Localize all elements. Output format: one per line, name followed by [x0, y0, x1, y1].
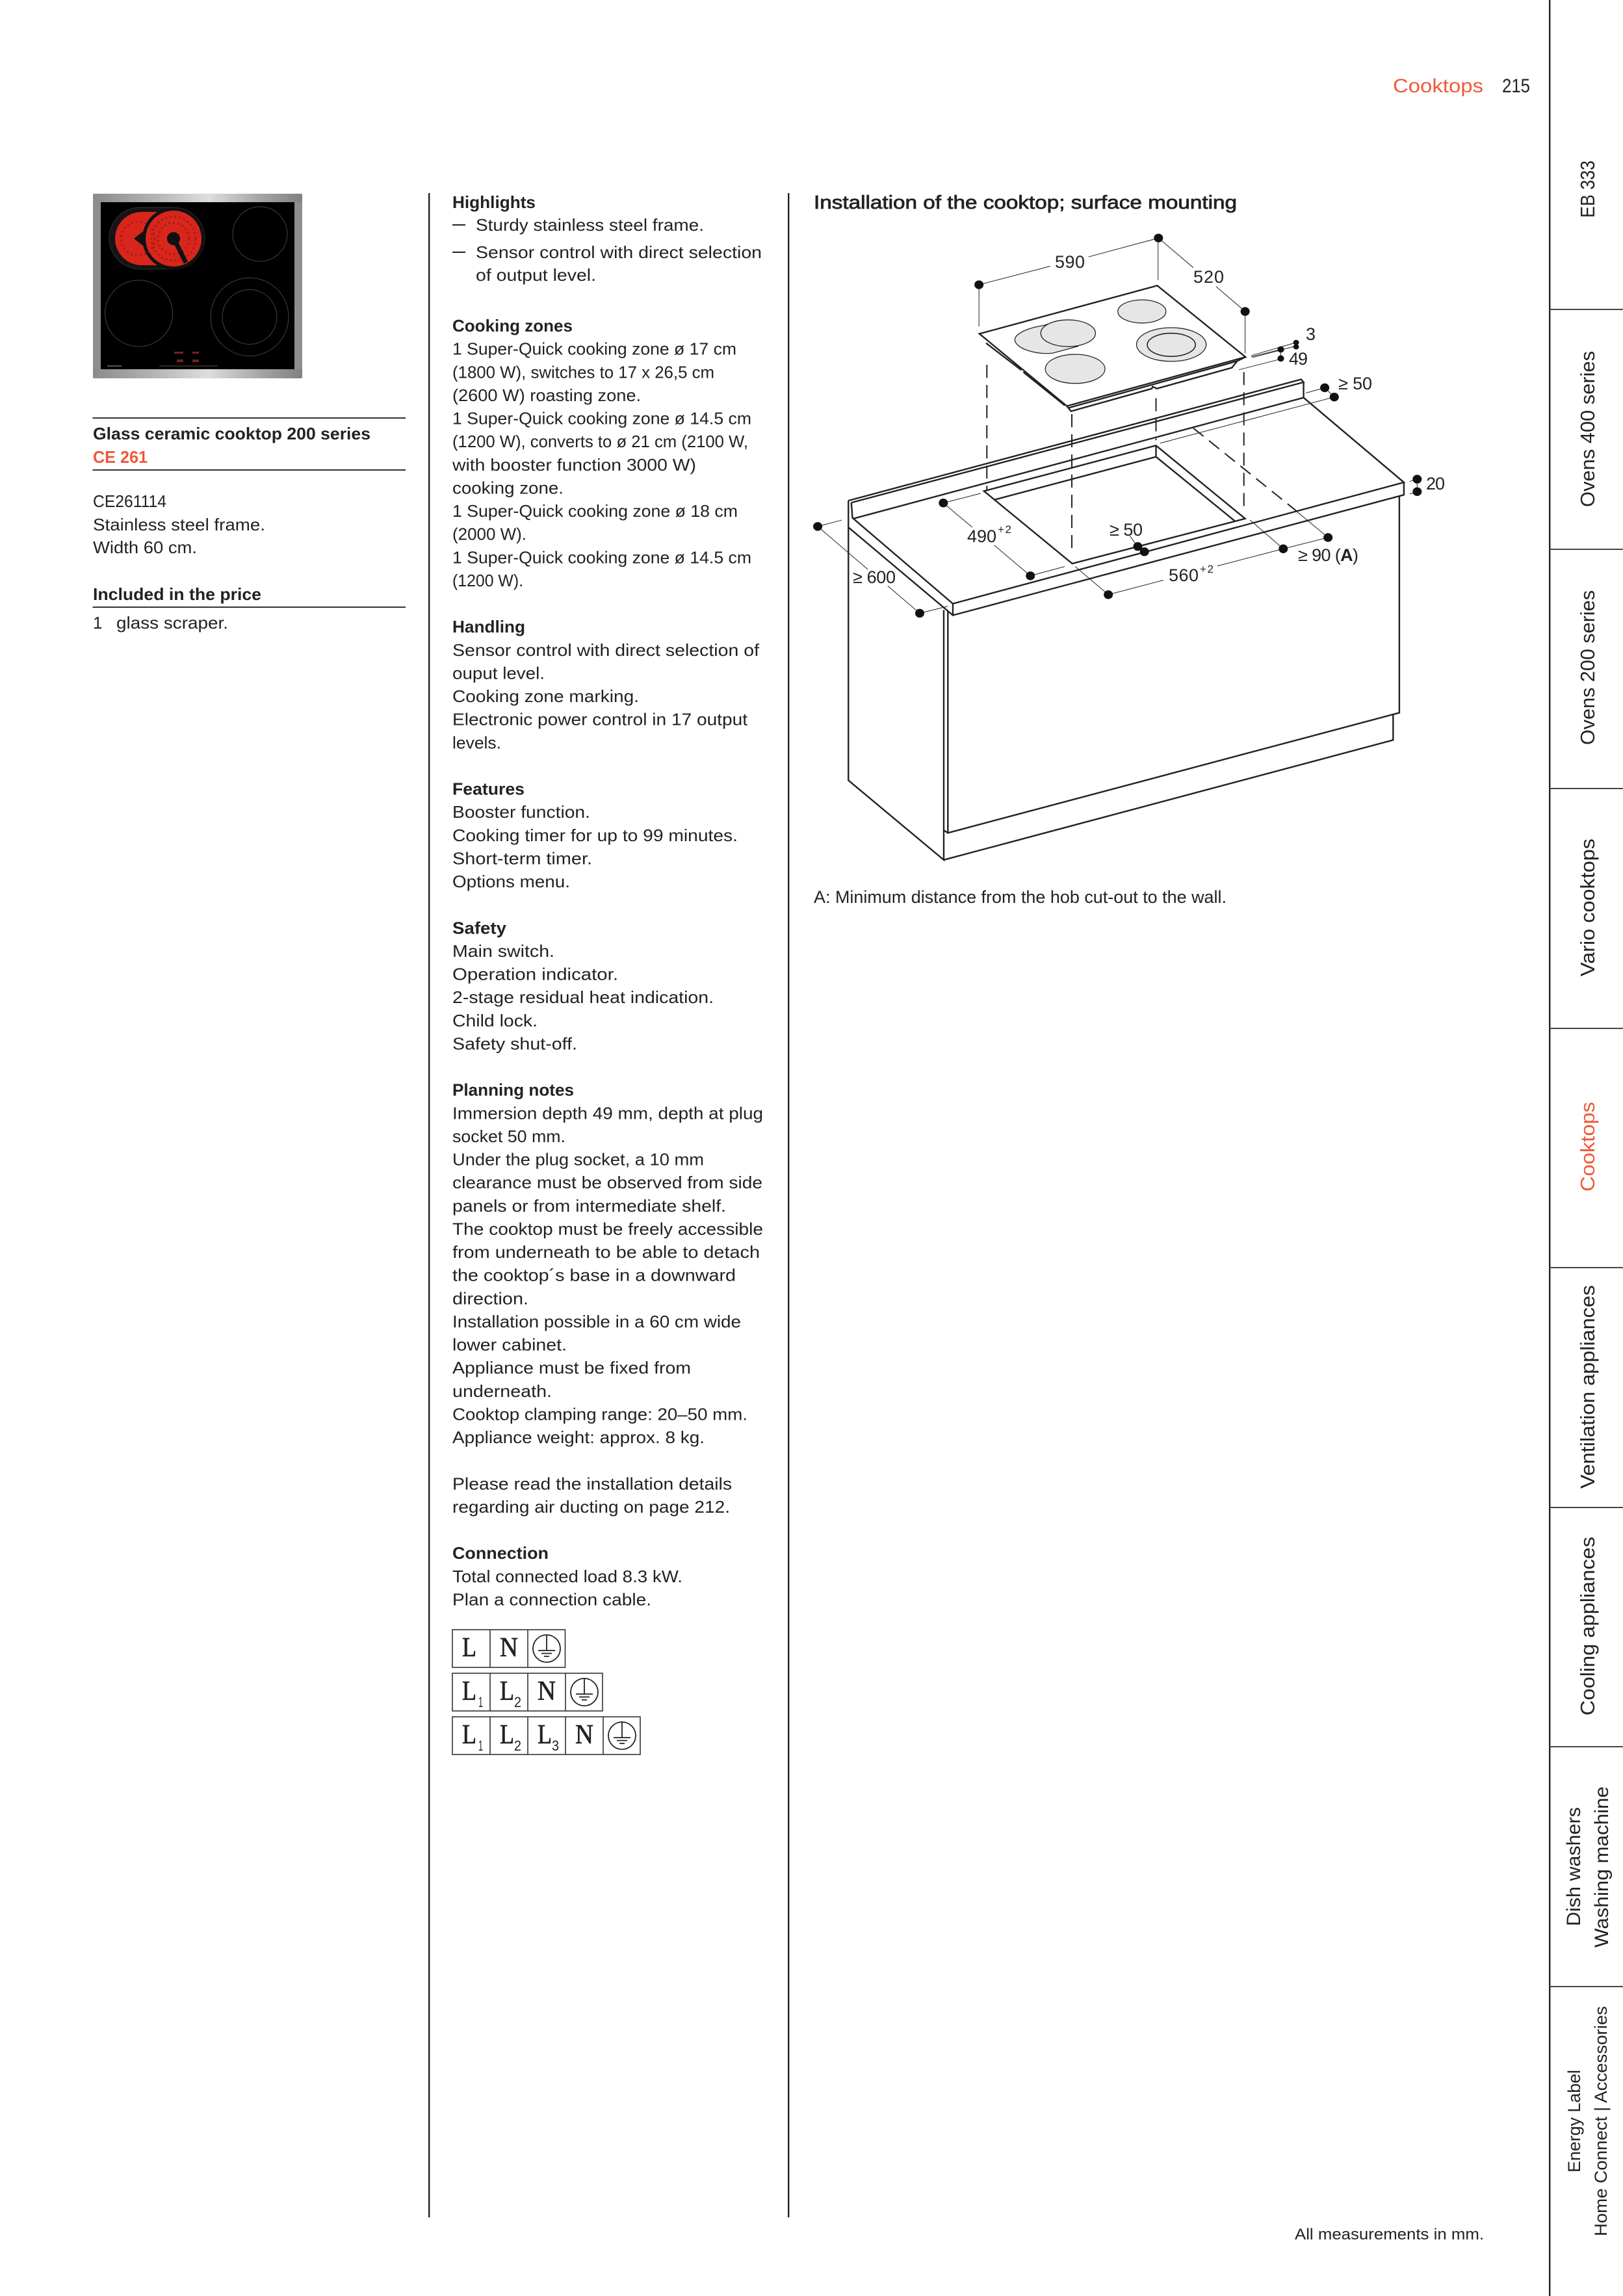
sidebar navigation: Cooling appliances	[1576, 1537, 1599, 1715]
included in the price: 1	[93, 613, 102, 633]
cooking zones: 1 Super-Quick cooking zone ø 18 cm	[452, 501, 738, 521]
features: Features	[452, 779, 525, 798]
page header: Cooktops	[1393, 75, 1483, 97]
features: Booster function.	[452, 802, 590, 822]
planning notes: the cooktop´s base in a downward	[452, 1266, 736, 1285]
planning notes: from underneath to be able to detach	[452, 1242, 760, 1262]
connection table: L1 L2 L3 N earth: 2	[514, 1738, 521, 1754]
dashed projection lines	[987, 365, 1297, 552]
column divider right	[788, 193, 789, 2217]
connection table: L1 L2 N earth: 2	[514, 1694, 521, 1710]
connection table: L1 L2 L3 N earth: L	[462, 1720, 476, 1750]
planning notes: lower cabinet.	[452, 1335, 567, 1355]
safety: Child lock.	[452, 1011, 538, 1030]
highlights	[452, 192, 762, 285]
footer note: All measurements in mm.	[1295, 2226, 1484, 2243]
sidebar navigation: Washing machine	[1591, 1786, 1613, 1948]
connection table: L1 L2 L3 N earth: 1	[478, 1738, 483, 1754]
handling: Cooking zone marking.	[452, 686, 639, 706]
planning notes: Immersion depth 49 mm, depth at plug	[452, 1103, 763, 1123]
connection table: L1 L2 N earth: L	[462, 1676, 476, 1706]
planning notes: The cooktop must be freely accessible	[452, 1219, 763, 1238]
highlights: Sturdy stainless steel frame.	[476, 215, 704, 235]
planning notes: underneath.	[452, 1381, 552, 1401]
sidebar navigation: Home Connect | Accessories	[1591, 2006, 1611, 2236]
dimension labels: +2	[998, 523, 1011, 536]
product title block	[92, 417, 406, 471]
safety: Safety	[452, 918, 507, 937]
page header: 215	[1502, 75, 1530, 97]
planning notes: regarding air ducting on page 212.	[452, 1497, 730, 1517]
dimension labels: 590	[1055, 252, 1085, 272]
highlights: Sensor control with direct selection	[476, 242, 762, 262]
connection: Total connected load 8.3 kW.	[452, 1567, 682, 1586]
connection table: L1 L2 L3 N earth: L	[500, 1720, 514, 1750]
product title block: CE 261	[93, 447, 148, 467]
dimension labels: ≥ 50	[1338, 374, 1372, 393]
dimension labels: 490	[967, 527, 996, 546]
product description	[93, 491, 265, 557]
cooking zones	[452, 316, 751, 590]
planning notes: Under the plug socket, a 10 mm	[452, 1149, 704, 1169]
planning notes: panels or from intermediate shelf.	[452, 1196, 726, 1216]
handling: Electronic power control in 17 output	[452, 710, 748, 729]
cooking zones: 1 Super-Quick cooking zone ø 17 cm	[452, 339, 736, 359]
cooking zones: (2600 W) roasting zone.	[452, 385, 641, 405]
dimension labels: ≥ 50	[1110, 520, 1143, 540]
cooktop	[980, 285, 1245, 411]
connection table: L N earth	[452, 1630, 565, 1667]
planning notes	[452, 1080, 763, 1517]
dimension labels: 3	[1306, 324, 1316, 344]
dimension labels: 560	[1169, 566, 1199, 585]
diagram heading: Installation of the cooktop; surface mounting	[814, 192, 1237, 213]
planning notes: Planning notes	[452, 1080, 574, 1100]
planning notes: direction.	[452, 1288, 528, 1308]
column divider left	[428, 193, 430, 2217]
dimension labels: 49	[1289, 349, 1308, 369]
dimension labels	[853, 252, 1445, 587]
cooking zones: (1200 W), converts to ø 21 cm (2100 W,	[452, 432, 748, 451]
sidebar navigation	[1549, 0, 1623, 2296]
cooking zones: (1800 W), switches to 17 x 26,5 cm	[452, 362, 714, 382]
cooking zones: (1200 W).	[452, 571, 523, 590]
product description: Stainless steel frame.	[93, 515, 265, 534]
handling	[452, 617, 760, 752]
highlights: Highlights	[452, 192, 536, 212]
connection table: L1 L2 N earth	[452, 1673, 603, 1711]
cooking zones: 1 Super-Quick cooking zone ø 14.5 cm	[452, 408, 751, 428]
photo: glass ceramic cooktop	[93, 194, 302, 378]
connection table: L N earth: N	[500, 1633, 518, 1663]
dimension labels: 520	[1193, 267, 1224, 287]
page header	[1393, 75, 1530, 97]
dimension labels: 20	[1426, 474, 1445, 493]
connection: Connection	[452, 1543, 549, 1563]
connection table: L1 L2 L3 N earth	[452, 1717, 640, 1755]
planning notes: Installation possible in a 60 cm wide	[452, 1312, 741, 1331]
planning notes: Please read the installation details	[452, 1474, 732, 1493]
sidebar navigation: EB 333	[1576, 161, 1599, 218]
sidebar navigation: Vario cooktops	[1576, 839, 1599, 976]
product description: CE261114	[93, 491, 166, 511]
handling: Handling	[452, 617, 525, 636]
cooking zones: cooking zone.	[452, 478, 564, 497]
planning notes: Cooktop clamping range: 20–50 mm.	[452, 1404, 747, 1424]
features: Short-term timer.	[452, 848, 592, 868]
cooking zones: Cooking zones	[452, 316, 573, 335]
safety: Safety shut-off.	[452, 1034, 577, 1053]
sidebar navigation: Dish washers	[1563, 1807, 1585, 1926]
dimension labels: +2	[1200, 563, 1214, 575]
features: Options menu.	[452, 872, 570, 891]
connection table: L1 L2 L3 N earth: N	[575, 1720, 593, 1750]
sidebar navigation: Energy Label	[1565, 2070, 1584, 2172]
handling: levels.	[452, 733, 501, 752]
planning notes: Appliance must be fixed from	[452, 1358, 691, 1377]
safety: Main switch.	[452, 941, 554, 961]
handling: ouput level.	[452, 663, 545, 683]
sidebar navigation: Ventilation appliances	[1576, 1285, 1599, 1489]
diagram footnote: A: Minimum distance from the hob cut-out to the wall.	[814, 887, 1227, 907]
dimension lines and dots	[813, 233, 1422, 618]
dimension labels: ≥ 90 (A)	[1298, 545, 1358, 565]
safety: 2-stage residual heat indication.	[452, 987, 714, 1007]
product title block: Glass ceramic cooktop 200 series	[93, 424, 370, 443]
planning notes: clearance must be observed from side	[452, 1173, 762, 1192]
sidebar navigation: Cooktops	[1576, 1102, 1599, 1192]
dimension labels: ≥ 600	[853, 567, 896, 587]
sidebar navigation: Ovens 400 series	[1576, 351, 1599, 507]
cooking zones: (2000 W).	[452, 525, 526, 544]
product description: Width 60 cm.	[93, 538, 197, 557]
included in the price: glass scraper.	[116, 613, 228, 633]
connection	[452, 1543, 682, 1609]
included in the price	[92, 584, 406, 633]
handling: Sensor control with direct selection of	[452, 640, 760, 660]
safety: Operation indicator.	[452, 965, 618, 984]
connection table: L1 L2 N earth: N	[538, 1676, 556, 1706]
cabinet and worktop	[848, 380, 1404, 860]
highlights: of output level.	[476, 265, 596, 285]
installation diagram	[813, 233, 1445, 860]
connection table: L1 L2 L3 N earth: 3	[552, 1738, 559, 1754]
planning notes: Appliance weight: approx. 8 kg.	[452, 1428, 705, 1447]
safety	[452, 918, 714, 1053]
features	[452, 779, 738, 891]
included in the price: Included in the price	[93, 584, 261, 604]
sidebar navigation: Ovens 200 series	[1576, 590, 1599, 745]
cooking zones: with booster function 3000 W)	[452, 455, 696, 475]
features: Cooking timer for up to 99 minutes.	[452, 826, 738, 845]
connection: Plan a connection cable.	[452, 1589, 651, 1609]
cooking zones: 1 Super-Quick cooking zone ø 14.5 cm	[452, 547, 751, 567]
connection table: L1 L2 N earth: 1	[478, 1694, 483, 1710]
connection table: L1 L2 L3 N earth: L	[538, 1720, 552, 1750]
connection table: L1 L2 N earth: L	[500, 1676, 514, 1706]
planning notes: socket 50 mm.	[452, 1127, 565, 1146]
connection table: L N earth: L	[462, 1633, 476, 1663]
